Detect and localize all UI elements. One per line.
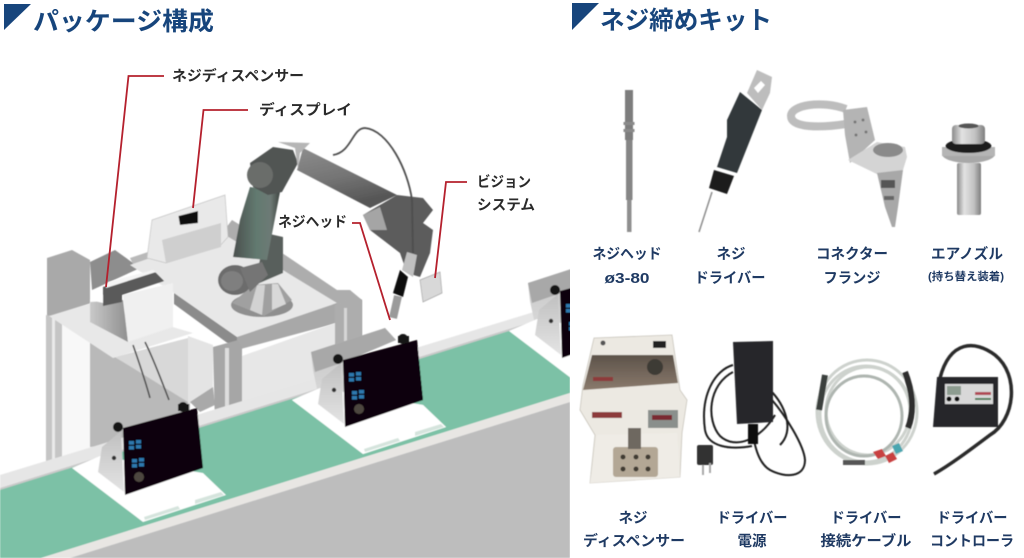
kit item: driver connection cable: ドライバー bbox=[830, 511, 902, 527]
kit item: driver controller: ドライバー bbox=[936, 511, 1008, 527]
vision camera bbox=[420, 272, 442, 302]
illustration: robot cell back section bbox=[47, 128, 442, 350]
kit item: screw head: ø3-80 bbox=[604, 271, 650, 287]
kit item: connector flange: フランジ bbox=[824, 271, 880, 287]
callout: screw head: ネジヘッド bbox=[278, 214, 347, 231]
kit item: driver connection cable bbox=[817, 360, 917, 550]
workpiece 1 bbox=[72, 402, 226, 522]
back frame of machine bbox=[47, 220, 362, 350]
callout: vision system bbox=[435, 173, 535, 278]
kit item: screw head: ネジヘッド bbox=[592, 246, 662, 263]
kit item: driver power supply bbox=[697, 341, 805, 550]
screw head tube bbox=[393, 270, 408, 297]
dispenser cables bbox=[133, 342, 169, 400]
kit item: screw dispenser: ネジ bbox=[618, 510, 648, 527]
callout: display: ディスプレイ bbox=[259, 101, 352, 119]
cable bbox=[333, 128, 413, 253]
robot arm bbox=[218, 128, 442, 318]
kit item: driver connection cable: 接続ケーブル bbox=[820, 532, 912, 550]
cabinet body bbox=[46, 296, 362, 470]
kit item: driver power supply: ドライバー bbox=[716, 511, 788, 527]
heading: package contents: パッケージ構成 bbox=[33, 8, 214, 36]
callout: screw head bbox=[278, 214, 390, 320]
kit item: air nozzle: エアノズル bbox=[931, 245, 1003, 263]
kit item: screw driver bbox=[694, 70, 772, 287]
callout: screw dispenser bbox=[106, 67, 304, 287]
cabinet, conveyor and workpieces bbox=[0, 268, 570, 558]
kit item: connector flange bbox=[791, 104, 907, 287]
kit item: screw driver: ドライバー bbox=[694, 271, 766, 287]
heading: screw tightening kit: ネジ締めキット bbox=[600, 7, 772, 35]
kit item: driver controller: コントローラ bbox=[930, 534, 1014, 550]
kit item: screw dispenser: ディスペンサー bbox=[583, 532, 685, 550]
workpiece 2 bbox=[292, 328, 446, 454]
display bbox=[147, 195, 228, 263]
kit item: driver power supply: 電源 bbox=[738, 533, 767, 550]
shelf bbox=[49, 303, 193, 358]
kit item: driver controller bbox=[930, 346, 1014, 550]
screw dispenser in scene bbox=[90, 270, 173, 342]
callout: screw dispenser: ネジディスペンサー bbox=[172, 67, 304, 85]
kit item: screw dispenser bbox=[580, 335, 687, 550]
kit item: screw head bbox=[592, 90, 662, 287]
kit item: air nozzle: (持ち替え装着) bbox=[928, 269, 1004, 283]
callout: vision system: システム bbox=[477, 197, 535, 214]
kit item: connector flange: コネクター bbox=[816, 246, 888, 263]
conveyor bbox=[0, 301, 570, 558]
kit item: air nozzle bbox=[928, 124, 1004, 283]
workpiece 3 bbox=[508, 268, 570, 378]
callout: vision system: ビジョン bbox=[477, 173, 531, 191]
kit item: screw driver: ネジ bbox=[716, 246, 746, 263]
robot base bbox=[231, 283, 293, 317]
callout: display bbox=[193, 101, 352, 208]
wrist bbox=[363, 195, 433, 277]
platform bbox=[130, 233, 337, 350]
